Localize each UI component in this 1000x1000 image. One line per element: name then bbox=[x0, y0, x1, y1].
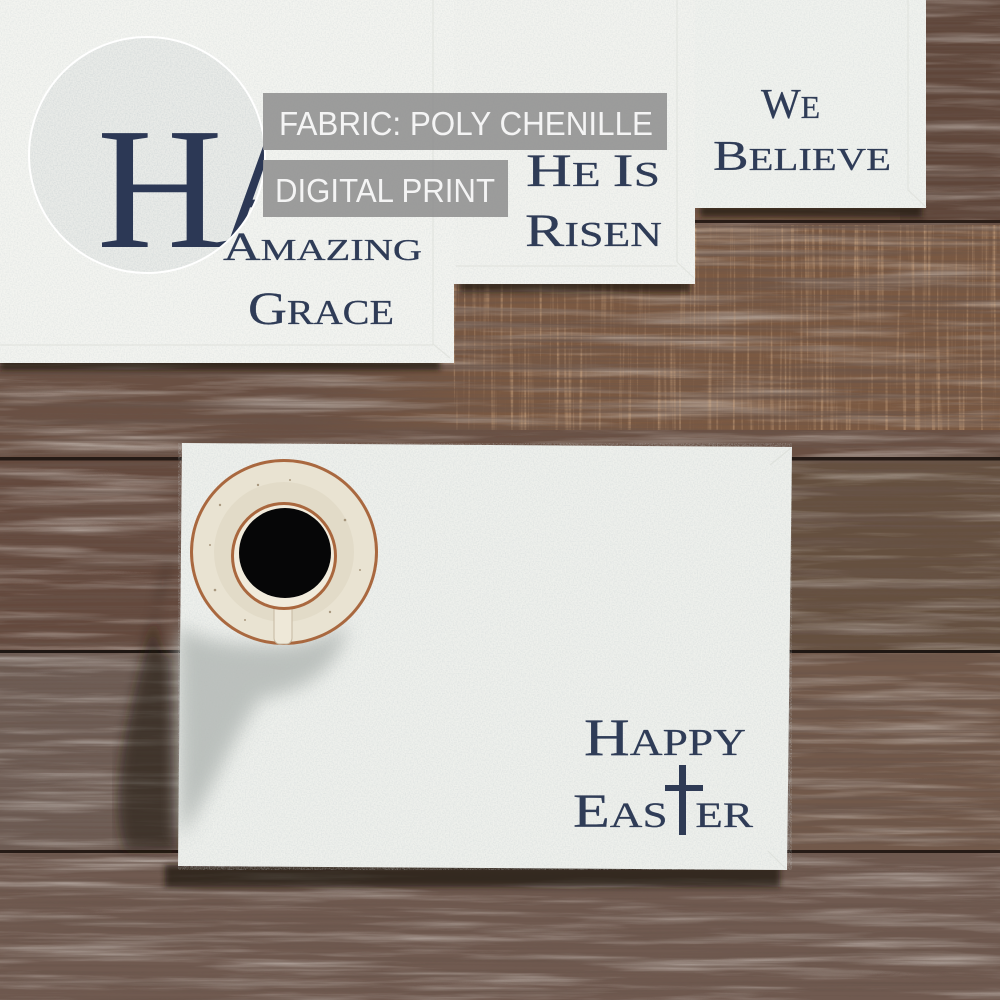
text: Happy Easter: EAS TER bbox=[573, 785, 753, 838]
placemat: Happy Easter bbox=[178, 443, 792, 870]
label: digital print bbox=[263, 160, 508, 217]
cup handle bbox=[274, 600, 292, 644]
shadow of cup on placemat bbox=[178, 622, 347, 838]
saucer bbox=[190, 459, 378, 645]
icon: cross bbox=[665, 765, 703, 835]
text: He Is Risen: RISEN bbox=[525, 205, 662, 257]
coffee cup and saucer bbox=[190, 459, 378, 645]
text: He Is Risen: H E IS bbox=[526, 145, 660, 197]
text: Amazing Grace: A MAZING bbox=[223, 224, 422, 269]
placemat: He Is Risen bbox=[440, 0, 695, 284]
text: We Believe bbox=[713, 82, 891, 180]
text: He Is Risen bbox=[525, 145, 662, 257]
text: Amazing Grace bbox=[223, 224, 422, 335]
cup body bbox=[231, 502, 337, 610]
placemat: We Believe bbox=[680, 0, 926, 208]
text: We Believe: BELIEVE bbox=[713, 134, 891, 180]
label: fabric: FABRIC: POLY CHENILLE bbox=[279, 106, 653, 143]
cup shadow on table bbox=[118, 555, 176, 850]
text: Amazing Grace: GRACE bbox=[248, 283, 394, 335]
placemat shadows bbox=[0, 205, 922, 887]
text: We Believe: WE bbox=[761, 82, 820, 128]
label: fabric bbox=[263, 93, 667, 150]
text: Happy Easter bbox=[573, 709, 753, 838]
label: digital print: DIGITAL PRINT bbox=[275, 173, 495, 210]
coffee bbox=[239, 508, 331, 598]
magnified letter: HA bbox=[97, 92, 340, 285]
text: Happy Easter: HAPPY bbox=[584, 709, 746, 767]
placemat: Amazing Grace bbox=[0, 0, 454, 363]
saucer speckles bbox=[209, 479, 361, 621]
magnified detail lens bbox=[28, 36, 266, 274]
